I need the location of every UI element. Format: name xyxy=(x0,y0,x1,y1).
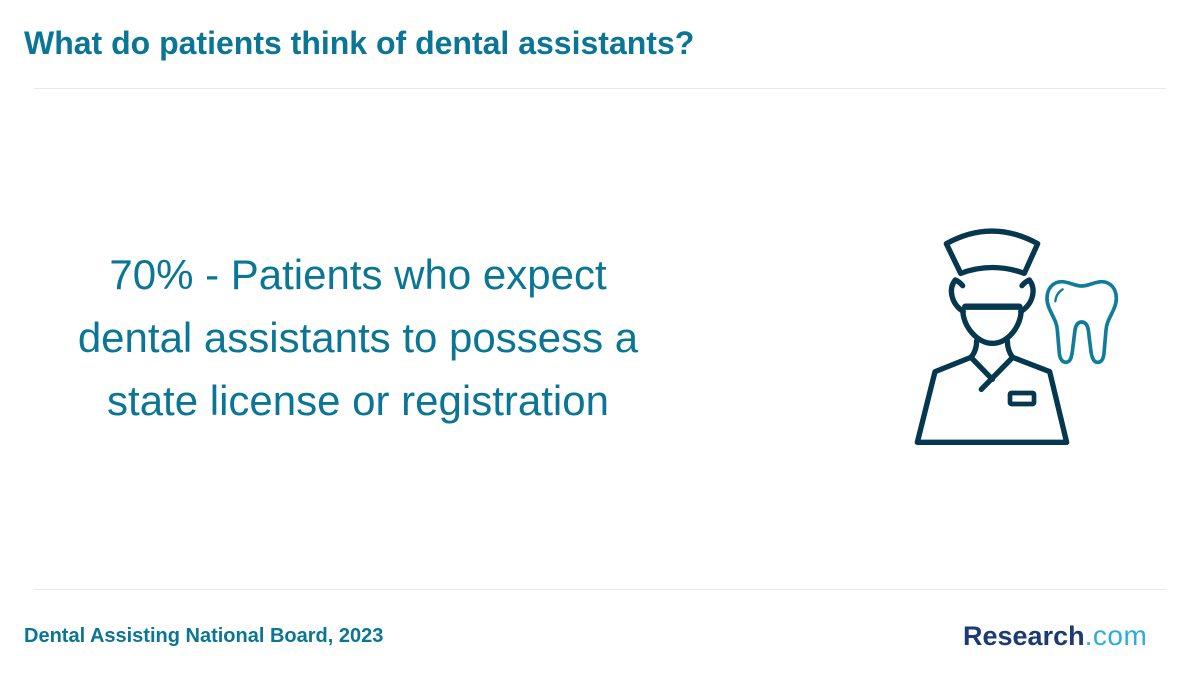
main statistic text: 70% - Patients who expect xyxy=(109,251,607,298)
icon: dental assistant with tooth xyxy=(914,228,1118,445)
main statistic text xyxy=(78,251,638,424)
source citation: Dental Assisting National Board, 2023 xyxy=(24,625,383,647)
icon: dental assistant figure xyxy=(917,231,1067,442)
main statistic text: dental assistants to possess a xyxy=(78,314,638,361)
logo: Research.com: Research.com xyxy=(963,620,1147,651)
main statistic text: state license or registration xyxy=(107,377,609,424)
icon: tooth xyxy=(1047,282,1116,362)
title: What do patients think of dental assistants? xyxy=(24,25,694,61)
